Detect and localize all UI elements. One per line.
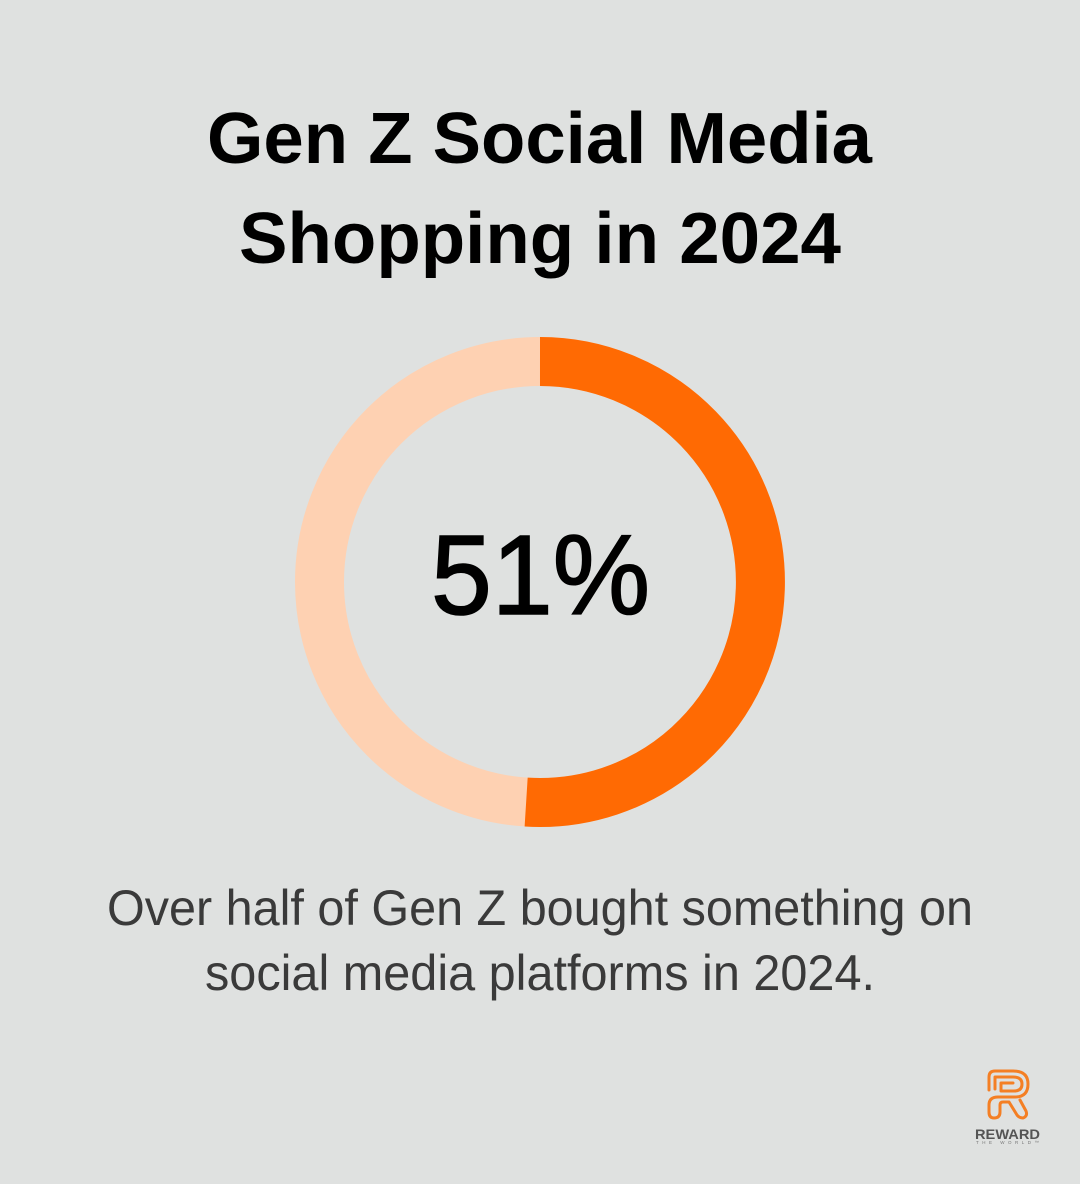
- 51% share arc: [526, 362, 760, 802]
- description text: social media platforms in 2024.: [205, 945, 875, 1001]
- logo wordmark: REWARD: [975, 1126, 1040, 1142]
- logo tagline: THE WORLD™: [976, 1140, 1039, 1145]
- title: [207, 99, 873, 279]
- description text: [107, 880, 973, 1001]
- value: 51%: 51%: [431, 512, 650, 638]
- description text: Over half of Gen Z bought something on: [107, 880, 973, 936]
- title: Shopping in 2024: [239, 199, 841, 279]
- title: Gen Z Social Media: [207, 99, 873, 179]
- donut chart: 51%: [320, 362, 760, 802]
- logo: Reward the World: [975, 1071, 1040, 1145]
- remaining share ring: [320, 362, 760, 802]
- icon: R mark: [989, 1071, 1028, 1118]
